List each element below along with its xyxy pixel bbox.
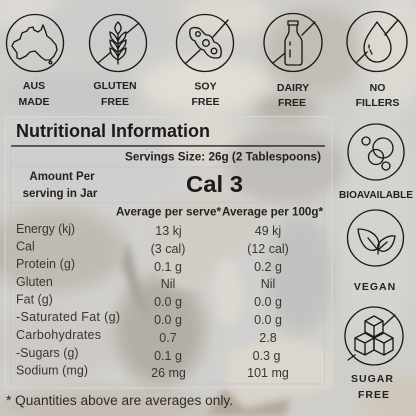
- nutrition rows: -Saturated Fat (g): [16, 310, 120, 324]
- nutrition rows: -Sugars (g): [16, 346, 79, 360]
- nutrition rows: Nil: [161, 277, 175, 291]
- label: dairy free: [277, 82, 309, 109]
- label: sugar free: [351, 373, 394, 401]
- nutrition rows: Nil: [261, 277, 275, 291]
- amount per serving: [23, 171, 98, 200]
- label: no fillers: NO: [370, 82, 385, 94]
- nutrition rows: Energy (kj): [16, 222, 75, 236]
- icon: gluten free: [90, 14, 146, 72]
- label: gluten free: GLUTEN: [93, 80, 137, 92]
- icon: bioavailable: [348, 124, 404, 180]
- servings size: Servings Size: 26g (2 Tablespoons): [125, 152, 321, 164]
- label: soy free: SOY: [194, 80, 217, 92]
- column headers: Average per serve*: [116, 206, 222, 218]
- calories headline: Cal 3: [186, 171, 243, 197]
- nutrition rows: Protein (g): [16, 257, 75, 271]
- amount per serving: Amount Per: [29, 171, 95, 183]
- nutrition rows: [16, 222, 289, 380]
- icon: vegan: [348, 210, 404, 266]
- label: no fillers: [356, 82, 399, 109]
- icon: soy free: [176, 14, 234, 72]
- column headers: [116, 206, 324, 218]
- nutrition rows: 0.1 g: [154, 349, 182, 363]
- label: bioavailable: BIOAVAILABLE: [339, 189, 413, 201]
- icon: no fillers: [347, 12, 407, 72]
- nutrition rows: Carbohydrates: [16, 328, 101, 342]
- nutrition rows: 2.8: [259, 331, 277, 345]
- label: dairy free: FREE: [278, 97, 306, 109]
- nutrition rows: Gluten: [16, 275, 53, 289]
- nutrition rows: 0.7: [159, 331, 177, 345]
- label: sugar free: FREE: [358, 389, 390, 401]
- nutrition rows: 0.2 g: [254, 260, 282, 274]
- label: aus made: AUS: [23, 80, 45, 92]
- label: vegan: VEGAN: [354, 281, 396, 293]
- nutrition rows: (12 cal): [247, 242, 289, 256]
- nutrition rows: Fat (g): [16, 292, 53, 306]
- nutrition rows: 0.0 g: [154, 295, 182, 309]
- nutrition rows: Cal: [16, 240, 35, 254]
- title: Nutritional Information: [16, 121, 210, 141]
- nutrition rows: 0.0 g: [254, 313, 282, 327]
- column headers: Average per 100g*: [222, 206, 324, 218]
- title rule: [11, 145, 325, 147]
- label: gluten free: FREE: [101, 96, 129, 108]
- nutrition rows: 0.0 g: [254, 295, 282, 309]
- label: sugar free: SUGAR: [351, 373, 394, 385]
- nutrition inner frame: [10, 146, 324, 384]
- label: soy free: FREE: [191, 96, 220, 108]
- nutrition rows: 0.3 g: [253, 349, 280, 363]
- nutrition rows: 13 kj: [155, 224, 182, 238]
- nutrition rows: Sodium (mg): [16, 364, 88, 378]
- icon: Australia: [6, 14, 64, 72]
- nutrition rows: 101 mg: [247, 366, 289, 380]
- nutrition rows: 26 mg: [151, 366, 186, 380]
- nutrition rows: 49 kj: [255, 224, 281, 238]
- label: dairy free: DAIRY: [277, 82, 309, 94]
- nutrition rows: 0.0 g: [154, 313, 182, 327]
- amount per serving: serving in Jar: [23, 188, 98, 200]
- label: no fillers: FILLERS: [356, 97, 399, 109]
- nutrition rows: 0.1 g: [154, 260, 182, 274]
- icon: dairy free: [264, 14, 322, 72]
- panel: nutrition table background: [5, 116, 332, 388]
- label: soy free: [191, 80, 220, 108]
- label: aus made: MADE: [19, 96, 49, 108]
- footnote: * Quantities above are averages only.: [6, 393, 233, 408]
- nutrition rows: (3 cal): [151, 242, 185, 256]
- label: gluten free: [93, 80, 137, 108]
- icon: sugar free: [345, 307, 403, 365]
- label: aus made: [19, 80, 49, 108]
